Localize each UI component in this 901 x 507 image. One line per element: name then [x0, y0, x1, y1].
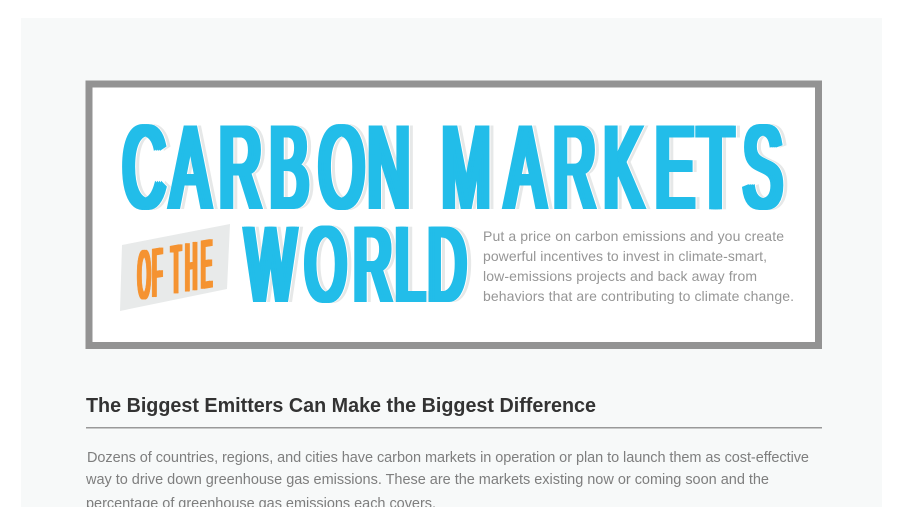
of the text: OF THE: [139, 226, 214, 314]
of the text: OF THE: [138, 226, 212, 314]
title: carbon markets: MARKETS: [439, 101, 779, 233]
title: of the banner: [120, 224, 230, 314]
heading rule: [86, 427, 822, 428]
title: carbon markets: CARBON: [124, 101, 411, 233]
title frame: [89, 84, 818, 346]
title: world: WORLD: [249, 206, 469, 323]
section paragraph: Dozens of countries, regions, and cities have carbon markets in operation or plan to launch them as cost-effective: [87, 450, 809, 466]
title: world: WORLD: [245, 206, 465, 323]
title: carbon markets: CARBON: [127, 101, 414, 233]
intro text: powerful incentives to invest in climate-smart,: [483, 248, 767, 264]
title: carbon markets: MARKETS: [445, 101, 785, 233]
title: carbon markets: MARKETS: [443, 101, 783, 233]
intro text: behaviors that are contributing to climate change.: [483, 288, 794, 304]
title: world: WORLD: [243, 206, 463, 323]
section heading: The Biggest Emitters Can Make the Biggest Difference: [86, 395, 596, 417]
intro text: [483, 228, 794, 304]
section paragraph: [85, 450, 809, 507]
title: carbon markets: CARBON: [122, 101, 409, 233]
intro text: Put a price on carbon emissions and you create: [483, 228, 784, 244]
of the text: OF THE: [136, 226, 211, 314]
title: carbon markets: MARKETS: [441, 101, 781, 233]
title: carbon markets: MARKETS: [446, 101, 786, 233]
title: carbon markets: CARBON: [120, 101, 407, 233]
title: world: WORLD: [253, 206, 473, 323]
section paragraph: way to drive down greenhouse gas emissions. These are the markets existing now or coming soon and the: [85, 472, 769, 488]
intro text: low-emissions projects and back away from: [483, 268, 757, 284]
title: carbon markets: MARKETS: [449, 101, 789, 233]
title: carbon markets: CARBON: [126, 101, 413, 233]
title: carbon markets: [120, 101, 789, 233]
title: world: WORLD: [247, 206, 467, 323]
title: world: WORLD: [250, 206, 470, 323]
title: carbon markets: CARBON: [130, 101, 417, 233]
